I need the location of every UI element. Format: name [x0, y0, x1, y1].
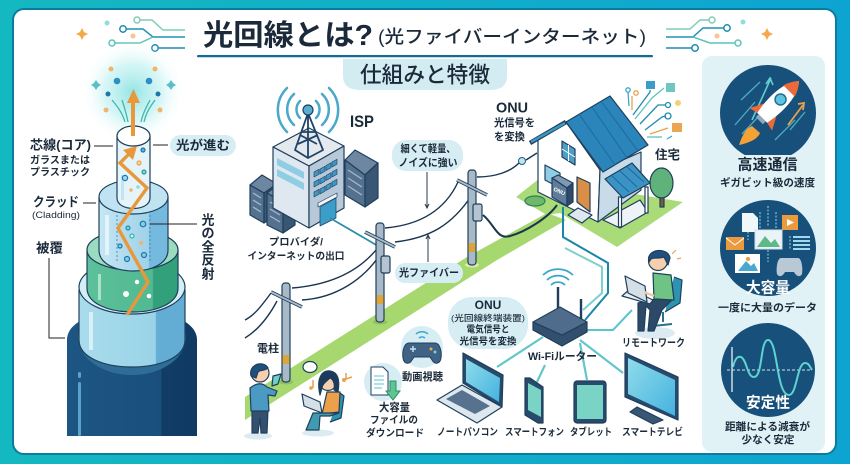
icon: media: 大容量: [746, 278, 790, 296]
core label: 芯線(コア): [30, 138, 91, 152]
label: download: ファイルの: [370, 414, 418, 426]
fiber from ISP to pole: [330, 218, 378, 246]
label: download: [366, 400, 424, 440]
label: Wi-Fi router: Wi-Fiルーター: [528, 350, 597, 363]
total reflection label: 反: [201, 252, 215, 268]
laptop: [437, 353, 503, 423]
callout: ONU terminal: ONU: [475, 298, 501, 312]
label: ONU conversion: を変換: [494, 130, 525, 143]
total reflection label: [150, 212, 215, 282]
right server: [345, 150, 378, 207]
heading: parenthetical: (光ファイバーインターネット): [378, 27, 646, 47]
label: ONU conversion: [494, 100, 535, 143]
subtitle pill: 仕組みと特徴: [360, 62, 490, 88]
ONU box: ONU: [552, 187, 566, 197]
label: download: ダウンロード: [366, 426, 424, 440]
coating label: [36, 240, 65, 338]
eave: [530, 122, 566, 143]
buffer layer: [79, 260, 185, 367]
total reflection label: 光: [201, 212, 215, 228]
decoration: circuit left: [76, 17, 185, 51]
person with smartphone: [244, 364, 281, 440]
heading: high speed: 高速通信: [738, 156, 798, 174]
steps: [568, 208, 592, 223]
label: video: 動画視聴: [402, 370, 443, 383]
callout: thin and light: ノイズに強い: [398, 156, 458, 169]
label: ONU conversion: ONU: [496, 100, 528, 116]
device links: [497, 337, 623, 382]
callout: ONU terminal: 光信号を変換: [460, 336, 517, 348]
green coating layer: [87, 230, 178, 312]
jacket layer: [67, 299, 197, 436]
overhead wires: [245, 153, 557, 338]
core glass: [117, 126, 150, 208]
icon: wifi waves: [543, 269, 573, 285]
callout: ONU terminal: [448, 297, 528, 349]
callout: light travels: [153, 135, 236, 156]
text: gigabit: ギガビット級の速度: [720, 176, 816, 189]
walls: [538, 122, 600, 222]
light glow and particles: [81, 40, 185, 144]
subtitle pill: [343, 59, 507, 90]
pole left: [271, 283, 302, 384]
Wi-Fi router: [533, 269, 587, 346]
icon: rocket: [720, 65, 816, 161]
label: download: 大容量: [379, 400, 410, 414]
icon: signal waves: [278, 88, 338, 132]
device labels: スマートフォン: [505, 426, 564, 438]
building block: [273, 128, 344, 166]
total reflection label: の: [201, 226, 215, 240]
door: [577, 177, 590, 212]
green ground strip: [245, 213, 566, 420]
left servers: [250, 175, 295, 233]
callout: optical fiber: [395, 235, 463, 283]
device labels: タブレット: [570, 426, 612, 438]
core label: プラスチック: [30, 166, 90, 178]
window grid: [314, 159, 337, 197]
ONU box: [552, 175, 573, 206]
text: stable: 少なく安定: [742, 433, 795, 446]
pole middle: [365, 223, 395, 324]
callout: thin and light: 細くて軽量、: [400, 142, 456, 155]
cladding layer: [99, 180, 168, 271]
gable window: [562, 141, 575, 165]
cladding label: クラッド: [33, 194, 79, 210]
bush: [525, 196, 545, 206]
callout: optical fiber: 光ファイバー: [399, 266, 459, 279]
callout: light travels: 光が進む: [176, 138, 230, 152]
cladding label: (Cladding): [32, 210, 80, 220]
panel: features: [702, 56, 825, 452]
porch: [603, 200, 648, 228]
label: provider: インターネットの出口: [248, 250, 344, 262]
text: stable: [725, 420, 811, 446]
icon: stable wave: [721, 323, 815, 417]
icon: media: [720, 200, 816, 296]
callout: ONU terminal: (光回線終端装置): [451, 313, 525, 323]
icon: stable wave: 安定性: [746, 394, 790, 412]
label: provider: プロバイダ/: [269, 236, 323, 248]
roof: [566, 96, 648, 172]
arrow: light zigzag path: [118, 89, 148, 315]
smartphone: [525, 378, 543, 423]
text: large data: 一度に大量のデータ: [718, 301, 817, 314]
total reflection label: 射: [201, 266, 215, 282]
person with laptop: [302, 362, 352, 436]
title: [197, 19, 653, 57]
device labels: スマートテレビ: [622, 426, 683, 438]
core label: ガラスまたは: [30, 154, 90, 166]
text: stable: 距離による減衰が: [725, 420, 811, 433]
decoration: data burst above house: [626, 81, 682, 139]
ISP building: [250, 88, 378, 233]
cladding label: [32, 194, 96, 220]
label: ONU conversion: 光信号を: [494, 116, 535, 129]
lawn: [516, 178, 683, 247]
label: ISP: ISP: [350, 113, 374, 131]
callout: ONU terminal: 電気信号と: [466, 324, 510, 336]
label: utility pole: 電柱: [257, 341, 279, 355]
connector node: [518, 158, 526, 164]
label: remote work: リモートワーク: [622, 337, 685, 349]
smart TV: [625, 353, 678, 424]
total reflection label: 全: [201, 240, 215, 254]
fiber cables from ONU to router: [563, 207, 632, 330]
device labels: ノートパソコン: [437, 426, 498, 438]
icon: file download: [364, 363, 402, 401]
decoration: circuit right: [666, 17, 773, 51]
remote worker: [622, 250, 682, 339]
tablet: [574, 381, 606, 423]
house: [525, 96, 673, 228]
icon: game controller: [401, 326, 443, 368]
core label: [30, 138, 113, 178]
label: provider: [248, 236, 344, 262]
cable cross-section illustration: [30, 40, 236, 436]
label: home: 住宅: [655, 147, 680, 162]
device labels: [437, 426, 683, 438]
pole right: [457, 170, 487, 268]
icon: tower: [295, 113, 323, 158]
heading: main title: 光回線とは?: [203, 19, 373, 52]
coating label: 被覆: [36, 240, 63, 256]
side window: [545, 165, 560, 188]
utility poles and wires: [245, 153, 557, 384]
callout: thin and light: [392, 140, 463, 208]
tree: [650, 168, 673, 207]
